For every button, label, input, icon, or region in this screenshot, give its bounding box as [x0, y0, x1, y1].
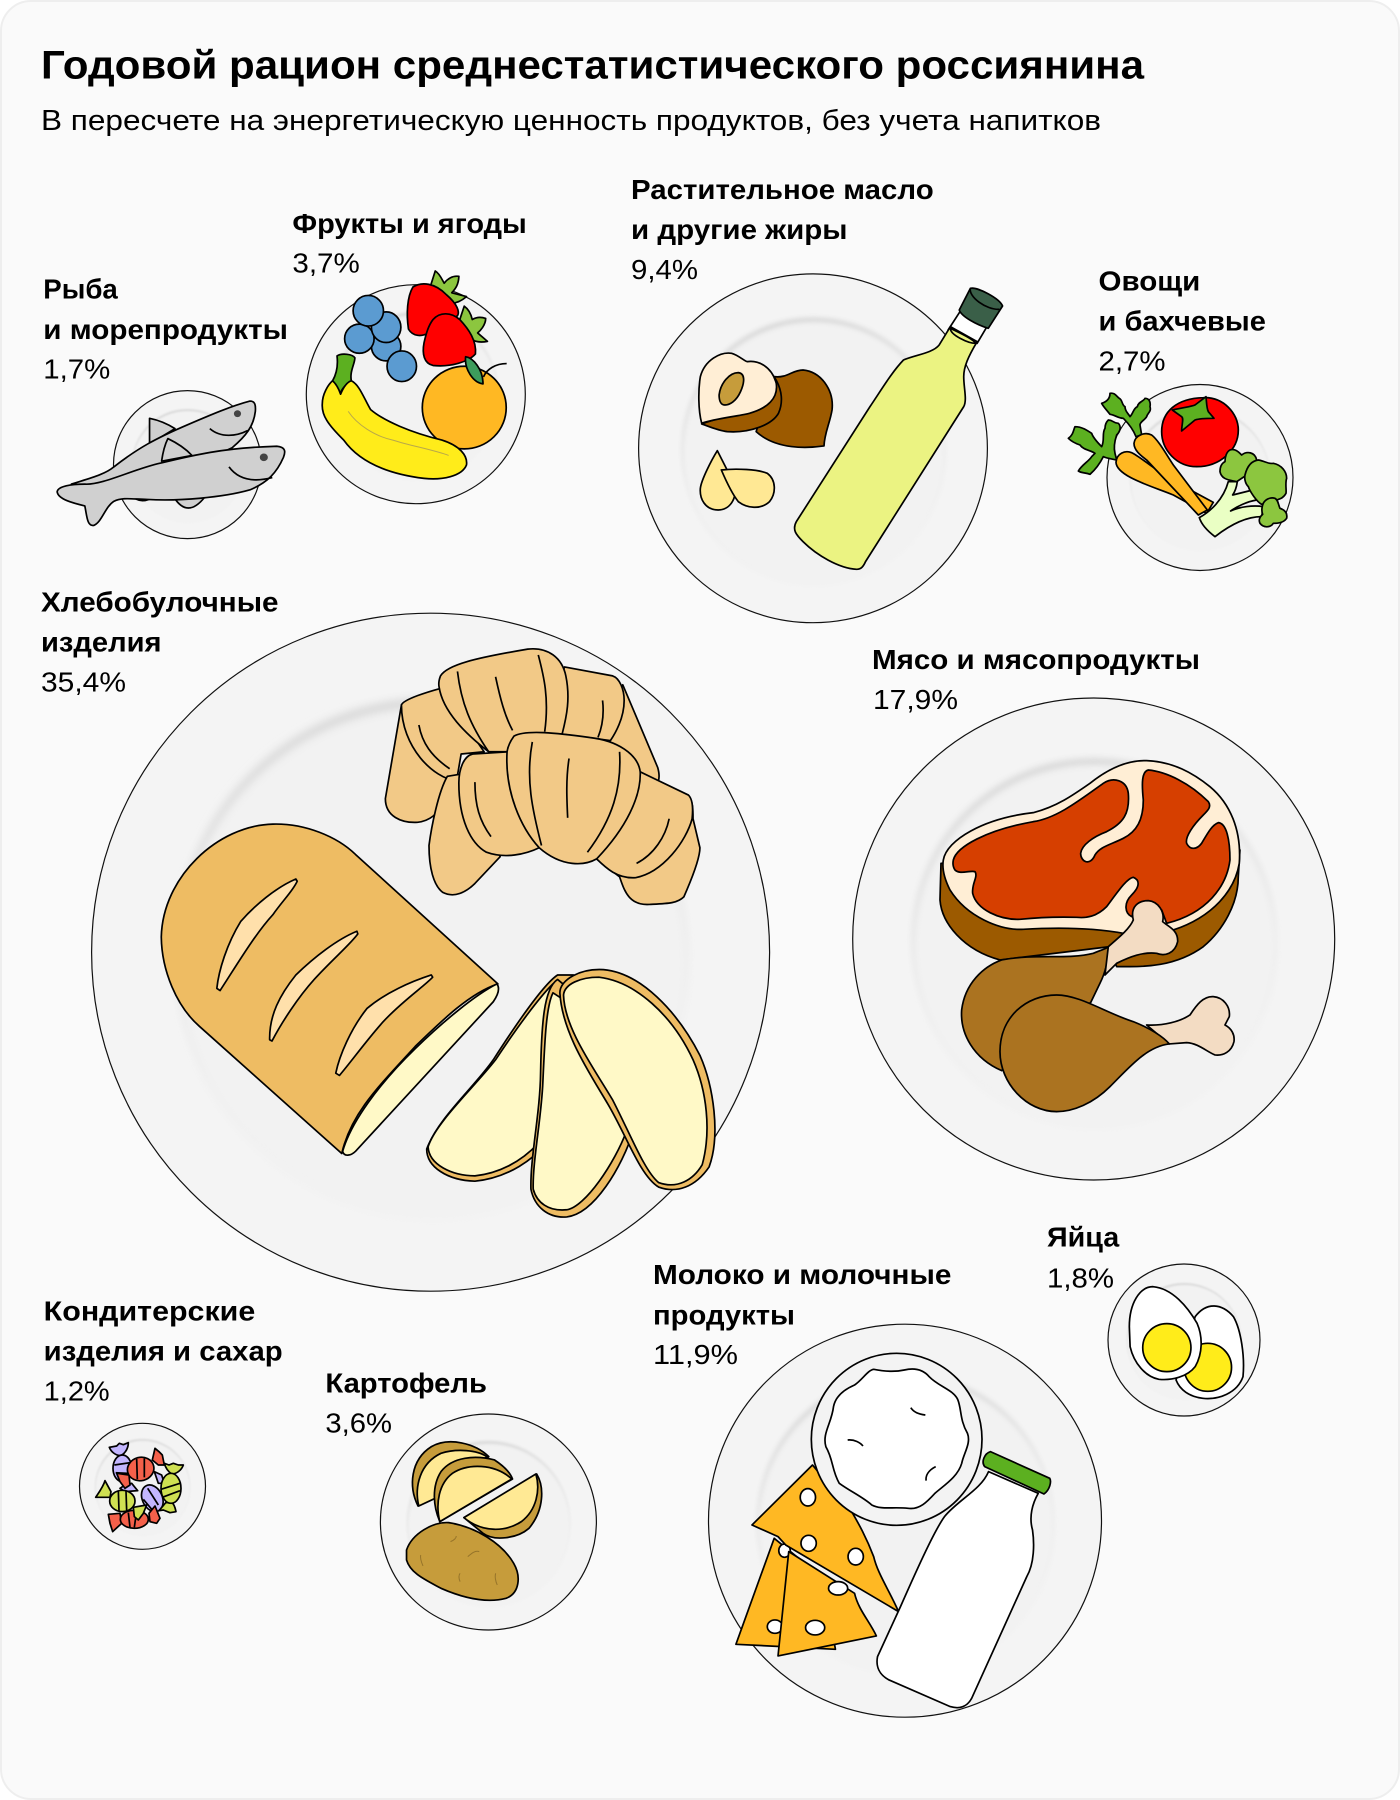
label: bakery: 35,4%: [41, 666, 126, 697]
panel: eggs: [1047, 1221, 1260, 1416]
icon: vegetables: [1068, 393, 1287, 537]
label: dairy: 11,9%: [653, 1339, 738, 1370]
panel: dairy: [653, 1259, 1102, 1717]
plate: vegetables: [1107, 384, 1293, 570]
label: potato: [325, 1367, 487, 1438]
plate: dairy: [708, 1324, 1102, 1717]
plate: bakery: [92, 613, 770, 1291]
label: fruit: Фрукты и ягоды: [292, 208, 527, 239]
label: vegetables: 2,7%: [1098, 346, 1166, 377]
label: oil: 9,4%: [631, 254, 698, 285]
icon: steak and chicken legs: [940, 761, 1240, 1112]
label: fruit: 3,7%: [292, 248, 360, 279]
icon: candies: [96, 1443, 183, 1532]
label: potato: Картофель: [325, 1367, 487, 1398]
icon: cheese, sour cream and milk bottle: [736, 1353, 1050, 1708]
panel: vegetables: [1068, 266, 1293, 570]
label: meat: Мясо и мясопродукты: [872, 644, 1200, 675]
label: bakery: изделия: [41, 627, 162, 658]
icon: potatoes: [407, 1442, 542, 1600]
plate: potato: [380, 1414, 596, 1630]
label: bakery: Хлебобулочные: [41, 586, 278, 618]
label: oil: и другие жиры: [631, 214, 848, 245]
panel: meat: [853, 644, 1335, 1180]
title: Годовой рацион среднестатистического россиянина: [41, 44, 1145, 88]
label: vegetables: и бахчевые: [1098, 306, 1266, 337]
plate: fruit: [306, 285, 525, 504]
panel: oil: [631, 174, 1003, 623]
plate: sweets: [80, 1423, 206, 1549]
icon: boiled eggs: [1129, 1287, 1243, 1399]
panel: potato: [325, 1367, 596, 1630]
plate: oil: [639, 274, 987, 623]
panel: sweets: [44, 1296, 283, 1549]
icon: fruit and berries: [322, 271, 507, 479]
panel: fruit: [292, 208, 527, 504]
label: bakery: [41, 586, 278, 697]
subtitle: В пересчете на энергетическую ценность продуктов, без учета напитков: [41, 105, 1101, 137]
label: vegetables: [1098, 266, 1266, 377]
label: sweets: изделия и сахар: [44, 1336, 283, 1367]
label: dairy: продукты: [653, 1300, 795, 1331]
label: potato: 3,6%: [325, 1407, 392, 1438]
label: fish: [43, 273, 288, 385]
label: meat: [872, 644, 1200, 715]
icon: oil bottle and nuts: [699, 288, 1003, 569]
label: fruit: [292, 208, 527, 279]
label: fish: и морепродукты: [43, 314, 288, 345]
label: eggs: 1,8%: [1047, 1262, 1114, 1293]
plate: eggs: [1108, 1264, 1260, 1416]
label: sweets: Кондитерские: [44, 1296, 255, 1327]
panel: bakery: [41, 586, 770, 1291]
icon: fish: [57, 401, 285, 525]
label: oil: Растительное масло: [631, 174, 934, 205]
label: sweets: 1,2%: [44, 1376, 110, 1407]
plate: meat: [853, 698, 1335, 1180]
icon: bread and croissants: [161, 649, 715, 1217]
label: eggs: [1047, 1221, 1120, 1293]
label: dairy: Молоко и молочные: [653, 1259, 951, 1290]
label: eggs: Яйца: [1047, 1221, 1120, 1252]
label: dairy: [653, 1259, 951, 1370]
label: fish: Рыба: [43, 273, 119, 304]
panel: fish: [43, 273, 288, 539]
plate: fish: [114, 391, 262, 539]
label: vegetables: Овощи: [1098, 266, 1200, 297]
label: meat: 17,9%: [873, 684, 958, 715]
label: sweets: [44, 1296, 283, 1407]
label: oil: [631, 174, 934, 285]
label: fish: 1,7%: [43, 354, 110, 385]
